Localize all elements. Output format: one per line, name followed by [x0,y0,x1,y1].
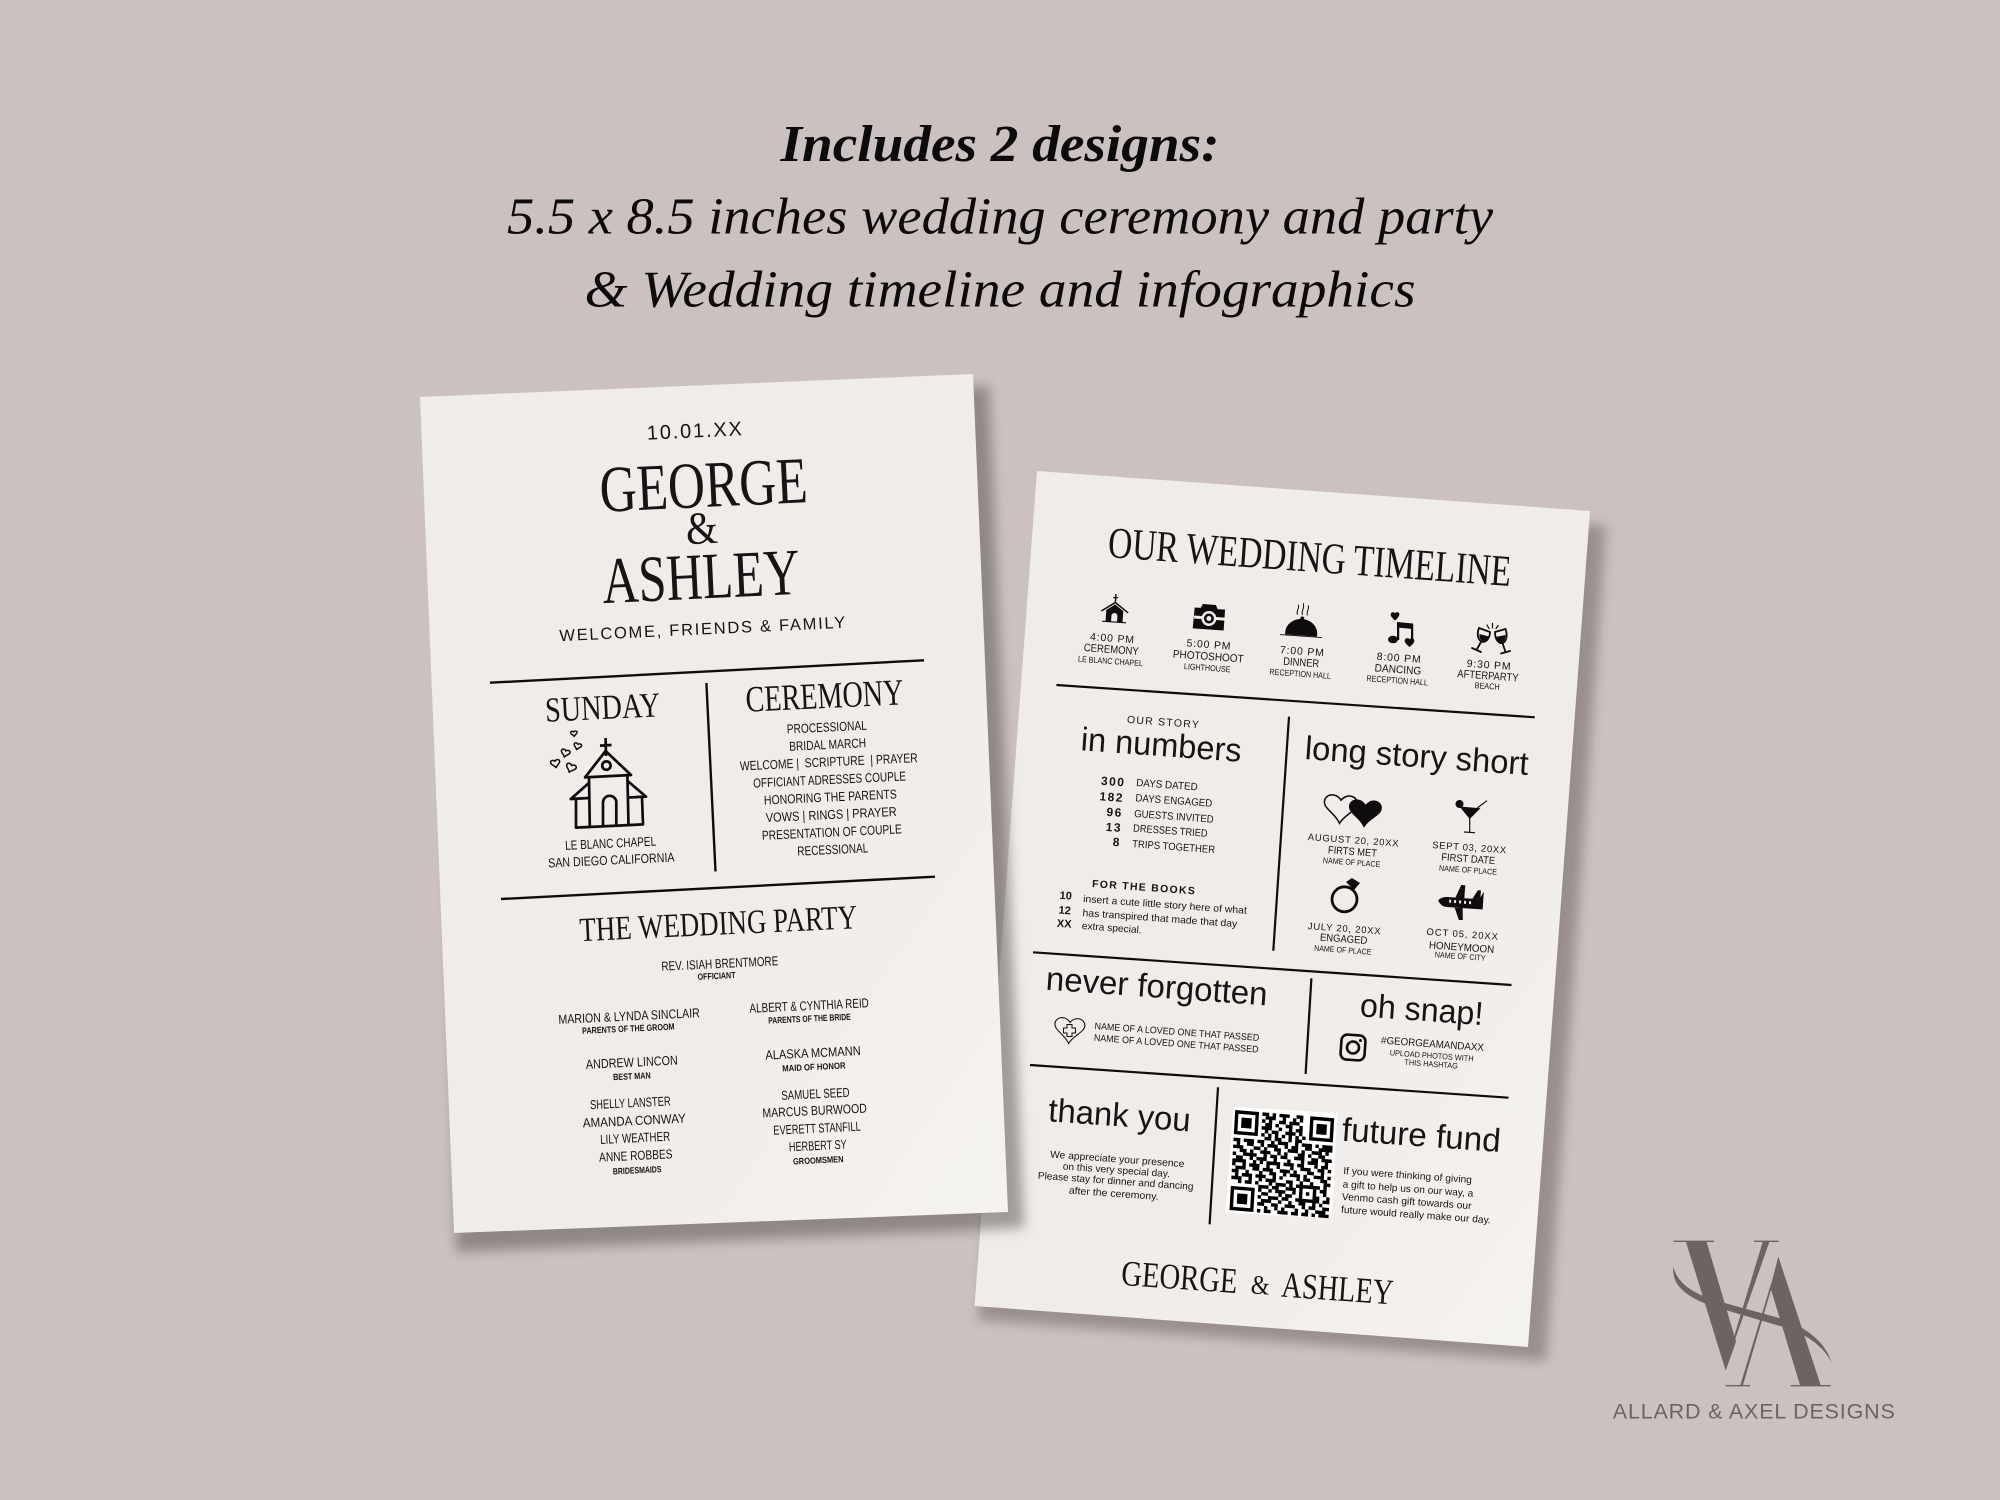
bride side: HERBERT SY [789,1137,847,1154]
for the books [1056,878,1247,936]
first date: FIRST DATE [1441,851,1496,867]
logo monogram [1673,1241,1832,1386]
timeline: dinner: 7:00 PM [1280,644,1324,659]
panel: ceremony program card [420,374,1024,1252]
couple names footer [1120,1253,1395,1312]
groom side: ANDREW LINCON [585,1053,678,1072]
stats list: 182 [1099,789,1124,805]
groom side: AMANDA CONWAY [582,1111,686,1130]
engaged [1307,921,1382,957]
panel: thank you: We appreciate your presence [1050,1150,1185,1170]
panel: ceremony order: PROCESSIONAL [786,718,867,736]
groom side: ANNE ROBBES [599,1146,673,1165]
panel: future fund [1341,1111,1502,1226]
icon: instagram [1340,1034,1366,1061]
couple names: & [685,502,719,554]
bride side: ALASKA MCMANN [765,1043,861,1063]
panel: future fund: a gift to help us on our way, a [1342,1179,1474,1200]
stats list [1099,774,1216,856]
timeline: dinner: DINNER [1283,656,1320,670]
names [1093,1021,1260,1056]
timeline: afterparty: 9:30 PM [1466,658,1511,673]
icon: chapel outline with hearts [550,731,646,828]
bride side [749,995,869,1166]
icon: ring [1332,878,1360,912]
date: 10.01.XX [646,418,742,445]
timeline: afterparty: BEACH [1474,680,1500,692]
venue: SAN DIEGO CALIFORNIA [548,850,675,870]
icon: airplane [1437,883,1484,921]
for the books: extra special. [1081,921,1142,936]
honeymoon [1426,927,1499,963]
first date: SEPT 03, 20XX [1432,840,1507,856]
panel: future fund: If you were thinking of giving [1343,1166,1472,1186]
bride side: GROOMSMEN [793,1154,844,1166]
qr code [1226,1107,1337,1218]
stats list: GUESTS INVITED [1134,808,1214,826]
for the books: insert a cute little story here of what [1083,894,1247,917]
groom side: SHELLY LANSTER [590,1093,671,1112]
icon: two hearts [1323,794,1382,829]
panel: thank you: after the ceremony. [1068,1186,1159,1203]
couple names footer: ASHLEY [1280,1265,1395,1312]
honeymoon: NAME OF CITY [1434,950,1487,963]
panel: ceremony order: PRESENTATION OF COUPLE [762,821,902,843]
timeline: dancing: RECEPTION HALL [1366,673,1429,688]
timeline: photoshoot: 5:00 PM [1186,637,1231,653]
first met: NAME OF PLACE [1323,856,1381,869]
bride side: EVERETT STANFILL [773,1119,861,1138]
groom side: BEST MAN [613,1070,651,1082]
officiant: OFFICIANT [697,970,736,982]
icon: toasting glasses [1472,624,1510,654]
title: Includes 2 designs: [779,116,1220,173]
panel: in numbers: in numbers [1080,720,1243,769]
for the books: has transpired that made that day [1082,908,1238,930]
groom side: LILY WEATHER [600,1129,670,1147]
groom side [558,1005,700,1176]
welcome line: WELCOME, FRIENDS & FAMILY [559,614,846,645]
timeline: afterparty: AFTERPARTY [1457,668,1519,685]
panel: never forgotten: never forgotten [1045,960,1269,1012]
panel: future fund: future would really make our day. [1341,1205,1491,1226]
panel: long story short [1304,729,1530,963]
panel: thank you: on this very special day. [1062,1161,1170,1180]
first met [1307,832,1400,869]
groom side: PARENTS OF THE GROOM [582,1022,675,1036]
groom side: BRIDESMAIDS [613,1164,662,1176]
timeline: photoshoot: LIGHTHOUSE [1184,661,1231,674]
first date: NAME OF PLACE [1439,864,1497,877]
honeymoon: HONEYMOON [1428,939,1495,956]
bride side: PARENTS OF THE BRIDE [768,1012,851,1026]
stats list: 13 [1105,820,1123,835]
panel: ceremony order [740,672,918,859]
hashtag text: UPLOAD PHOTOS WITH [1389,1048,1474,1063]
icon: music notes [1388,612,1414,647]
stats list: 300 [1101,774,1126,789]
venue [548,834,675,870]
panel: wedding party [558,899,869,1176]
logo wordmark: ALLARD & AXEL DESIGNS [1613,1399,1895,1423]
stats list: 8 [1112,835,1121,849]
bride side: MARCUS BURWOOD [762,1101,867,1120]
panel: in numbers [1056,714,1247,936]
honeymoon: OCT 05, 20XX [1426,927,1499,943]
venue: LE BLANC CHAPEL [565,834,656,853]
couple names footer: GEORGE [1120,1253,1239,1301]
icon: medical heart [1054,1017,1085,1045]
panel: long story short: long story short [1304,729,1530,782]
logo: allard and axel designs [1613,1241,1895,1423]
panel: ceremony order: HONORING THE PARENTS [764,786,897,808]
engaged: NAME OF PLACE [1314,944,1372,957]
panel: thank you [1037,1091,1194,1203]
panel: thank you: Please stay for dinner and dancing [1037,1171,1194,1193]
bride side: SAMUEL SEED [781,1085,850,1103]
timeline: photoshoot: PHOTOSHOOT [1172,648,1244,666]
title: 5.5 x 8.5 inches wedding ceremony and party [507,188,1494,246]
couple names: ASHLEY [600,536,802,618]
bride side: ALBERT & CYNTHIA REID [749,995,869,1016]
timeline heading: OUR WEDDING TIMELINE [1107,518,1513,596]
timeline: afterparty [1457,658,1519,692]
timeline: ceremony: 4:00 PM [1090,631,1134,646]
timeline icons and labels [1078,593,1519,692]
bride side: MAID OF HONOR [782,1060,846,1073]
stats list: 96 [1106,805,1123,820]
timeline: ceremony: CEREMONY [1083,642,1140,658]
panel: wedding timeline card [974,471,1606,1361]
panel: thank you: thank you [1047,1091,1192,1138]
icon: chapel [1100,593,1130,624]
panel: future fund: future fund [1341,1111,1502,1159]
couple names: GEORGE [598,444,809,527]
groom side: MARION & LYNDA SINCLAIR [558,1005,700,1027]
panel: sunday: SUNDAY [544,685,661,730]
stats list: DAYS ENGAGED [1135,792,1213,810]
names: NAME OF A LOVED ONE THAT PASSED [1094,1021,1260,1044]
panel: ceremony order: WELCOME | SCRIPTURE | PRAYER [740,750,918,773]
stats list: DRESSES TRIED [1133,823,1208,840]
hashtag text: #GEORGEAMANDAXX [1381,1035,1484,1054]
engaged: JULY 20, 20XX [1307,921,1382,937]
timeline: ceremony [1078,631,1144,668]
for the books: 12 [1058,905,1071,917]
first met: AUGUST 20, 20XX [1307,832,1400,850]
timeline: dancing: DANCING [1374,662,1422,678]
couple names [598,444,809,618]
engaged: ENGAGED [1319,932,1368,947]
timeline: dancing [1366,651,1429,688]
panel: ceremony order: VOWS | RINGS | PRAYER [765,804,897,825]
panel: sunday [544,685,675,870]
for the books: XX [1056,918,1073,931]
hashtag text: THIS HASHTAG [1404,1058,1458,1071]
names: NAME OF A LOVED ONE THAT PASSED [1093,1033,1259,1056]
panel: ceremony order: BRIDAL MARCH [789,735,866,754]
timeline: ceremony: LE BLANC CHAPEL [1078,654,1144,668]
panel: oh snap [1340,986,1485,1071]
title: & Wedding timeline and infographics [584,262,1416,318]
first met: FIRTS MET [1328,844,1378,860]
timeline: photoshoot [1172,637,1244,674]
officiant [661,953,779,982]
panel: oh snap: oh snap! [1359,986,1485,1032]
first date [1432,840,1507,877]
panel: never forgotten [1045,960,1269,1056]
stats list: TRIPS TOGETHER [1132,838,1216,856]
panel: future fund: Venmo cash gift towards our [1341,1192,1473,1212]
panel: ceremony order: RECESSIONAL [797,840,869,859]
officiant: REV. ISIAH BRENTMORE [661,953,779,974]
timeline: dinner: RECEPTION HALL [1269,667,1332,681]
hashtag text [1381,1035,1484,1071]
panel: in numbers: OUR STORY [1127,714,1199,731]
icon: cloche [1280,602,1324,638]
couple names footer: & [1250,1269,1271,1301]
for the books: 10 [1059,890,1072,903]
panel: ceremony order: OFFICIANT ADRESSES COUPLE [753,768,907,791]
stats list: DAYS DATED [1136,777,1198,793]
icon: camera [1193,603,1226,631]
timeline: dinner [1269,644,1332,681]
panel: wedding party: THE WEDDING PARTY [579,899,858,949]
icon: cocktail [1456,800,1487,833]
panel: ceremony order: CEREMONY [745,672,904,721]
timeline: dancing: 8:00 PM [1376,651,1421,666]
title [507,116,1494,318]
for the books: FOR THE BOOKS [1092,878,1195,897]
